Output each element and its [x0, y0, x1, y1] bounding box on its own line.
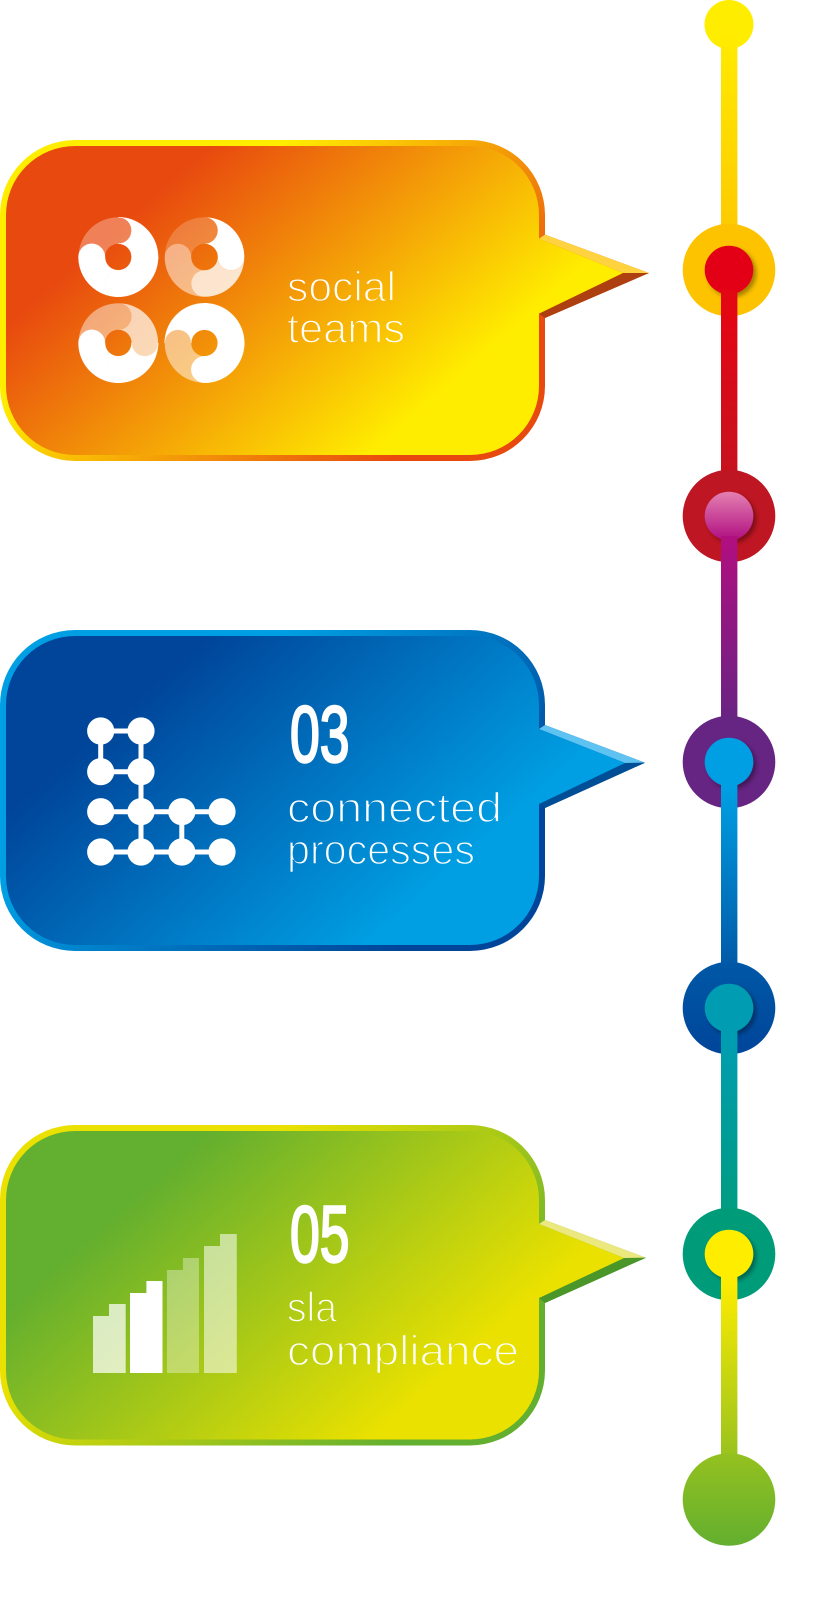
bar 4 [204, 1234, 237, 1373]
label: sla compliance: compliance [287, 1327, 519, 1374]
bar 1 [93, 1304, 126, 1373]
node: top cap [704, 0, 754, 49]
bubble border [0, 140, 649, 461]
panel: connected processes [0, 630, 645, 951]
pointer shadow [539, 273, 649, 318]
line segment 1 [721, 25, 737, 260]
label: sla compliance [287, 1284, 519, 1374]
line segment 5 [721, 1028, 737, 1244]
number 03: 03 [290, 690, 350, 779]
node 3 [683, 470, 775, 562]
icon: stepped bar chart [93, 1234, 237, 1373]
label: social teams [287, 263, 405, 352]
pointer shadow [539, 763, 645, 808]
icon: connected node network [87, 717, 236, 866]
bubble border [0, 630, 645, 951]
label: connected processes: processes [287, 826, 475, 873]
ring 1 [78, 217, 158, 297]
label: connected processes [287, 784, 502, 873]
bar 2 [130, 1281, 162, 1373]
node 2 [683, 224, 775, 316]
ring 3 [78, 303, 158, 383]
line segment 2 [721, 290, 737, 506]
node 4 [683, 716, 775, 808]
line segment 3 [721, 536, 737, 752]
panel: sla compliance [0, 1125, 646, 1446]
label: social teams: social [287, 263, 396, 310]
line segment 6 [721, 1274, 737, 1490]
node 7 [683, 1453, 775, 1546]
label: connected processes: connected [287, 784, 502, 831]
pointer shadow [539, 1258, 646, 1303]
bubble fill [6, 636, 625, 945]
panel: social teams [0, 140, 649, 461]
bubble fill [6, 1131, 624, 1440]
node 5 [683, 962, 775, 1054]
icon: four ring pinwheels [78, 217, 244, 383]
label: social teams: teams [287, 305, 405, 352]
bar 3 [167, 1258, 199, 1373]
node 6 [683, 1208, 775, 1300]
pointer highlight [539, 235, 649, 273]
pointer highlight [539, 725, 645, 763]
ring 4 [165, 303, 244, 383]
line segment 4 [721, 782, 737, 998]
bubble border [0, 1125, 646, 1446]
timeline [683, 0, 775, 1546]
bubble fill [6, 146, 623, 455]
label: sla compliance: sla [287, 1284, 338, 1331]
number 05: 05 [290, 1190, 350, 1279]
ring 2 [165, 217, 244, 297]
pointer highlight [539, 1220, 646, 1258]
